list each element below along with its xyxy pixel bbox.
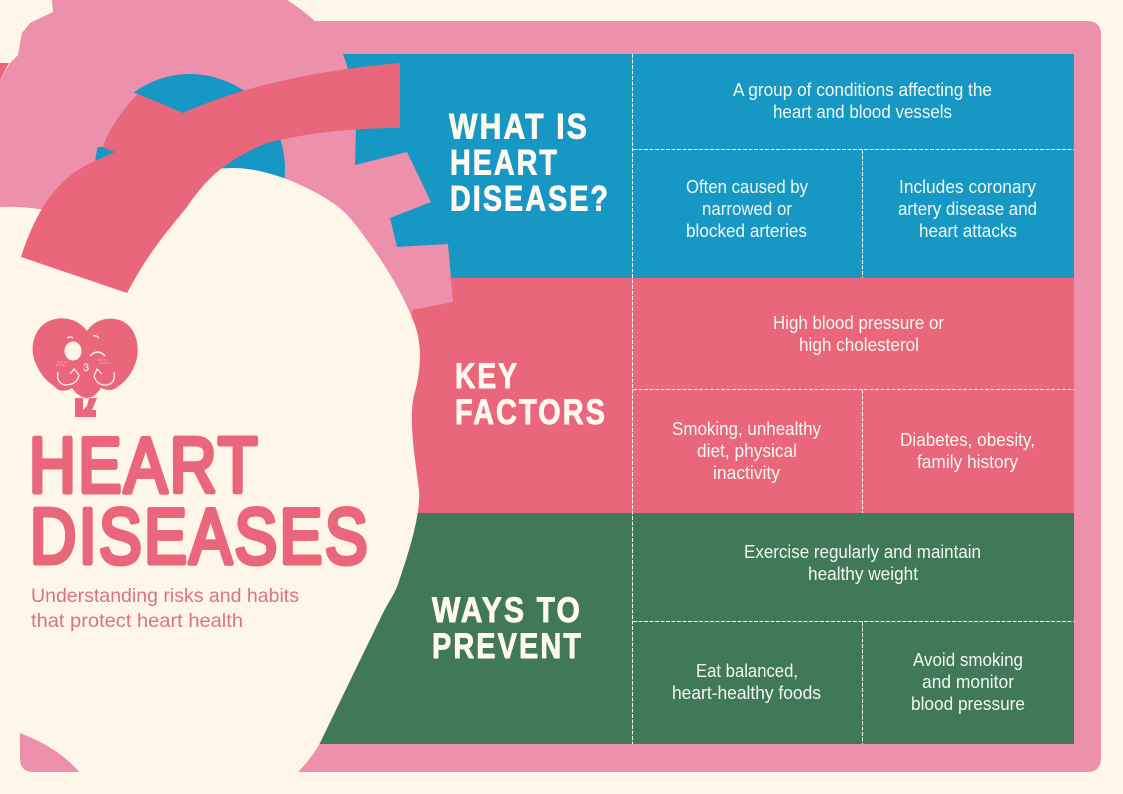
mascot eye: [64, 342, 82, 360]
text: lifestyle factor: diet, physical: [697, 441, 797, 461]
section band: ways to prevent: [300, 513, 1074, 744]
text: avoid smoking: Avoid smoking: [913, 650, 1023, 670]
text: diet: heart-healthy foods: [672, 683, 821, 703]
text: causes: Often caused by: [686, 177, 808, 197]
mascot heart body: [33, 318, 138, 398]
subtitle: [31, 585, 299, 632]
text: diet: Eat balanced,: [696, 661, 798, 681]
text: blood pressure factor: High blood pressure or: [773, 313, 944, 333]
text: lifestyle factor: [672, 419, 821, 483]
text: blood pressure factor: [773, 313, 944, 355]
text: exercise: [744, 542, 981, 584]
title: [29, 421, 370, 580]
text: causes: narrowed or: [702, 199, 792, 219]
heading: key factors: FACTORS: [455, 393, 607, 432]
mascot winking eye: [90, 352, 105, 356]
text: medical factor: Diabetes, obesity,: [900, 430, 1035, 450]
subtitle: Understanding risks and habits: [31, 585, 299, 607]
text: avoid smoking: and monitor: [922, 672, 1014, 692]
heading: what is heart disease: [449, 108, 610, 218]
text: medical factor: [900, 430, 1035, 472]
section band: what is heart disease: [343, 54, 1074, 278]
title: HEART: [29, 421, 260, 509]
mascot kiss mouth: 3: [83, 362, 89, 374]
text: causes: blocked arteries: [686, 221, 807, 241]
title: DISEASES: [30, 492, 370, 580]
heading: ways to prevent: WAYS TO: [432, 591, 582, 630]
text: definition: [733, 80, 992, 122]
red sliver at left edge: [0, 63, 9, 80]
heading: ways to prevent: PREVENT: [432, 627, 583, 666]
heading: ways to prevent: [432, 591, 583, 666]
heading: what is heart disease: HEART: [450, 144, 559, 182]
text: lifestyle factor: inactivity: [713, 463, 780, 483]
mascot eyebrows: [67, 336, 99, 338]
heading: key factors: [455, 357, 607, 432]
text: avoid smoking: blood pressure: [911, 694, 1025, 714]
text: lifestyle factor: Smoking, unhealthy: [672, 419, 821, 439]
text: exercise: Exercise regularly and maintain: [744, 542, 981, 562]
icon: heart mascot: [33, 318, 138, 417]
pink corner bottom left: [20, 733, 79, 772]
text: medical factor: family history: [917, 452, 1018, 472]
text: definition: heart and blood vessels: [773, 102, 952, 122]
text: diet: [672, 661, 821, 703]
text: includes: Includes coronary: [899, 177, 1036, 197]
text: avoid smoking: [911, 650, 1025, 714]
text: includes: heart attacks: [919, 221, 1017, 241]
text: exercise: healthy weight: [808, 564, 918, 584]
mascot blush: [56, 360, 110, 365]
heading: what is heart disease: DISEASE?: [450, 180, 610, 218]
text: definition: A group of conditions affecting the: [733, 80, 992, 100]
heading: key factors: KEY: [455, 357, 519, 396]
cream body shape: [0, 168, 420, 772]
red artery arch: [21, 63, 400, 293]
subtitle: that protect heart health: [31, 610, 243, 632]
pink mask over left of circle: [85, 75, 138, 147]
text: blood pressure factor: high cholesterol: [799, 335, 919, 355]
text: causes: [686, 177, 808, 241]
blue circle behind arch: [95, 74, 285, 264]
text: includes: [898, 177, 1037, 241]
mascot hands: [58, 369, 114, 385]
text: includes: artery disease and: [898, 199, 1037, 219]
section band: key factors: [400, 278, 1074, 513]
heading: what is heart disease: WHAT IS: [449, 108, 589, 146]
mascot legs: [75, 398, 97, 417]
